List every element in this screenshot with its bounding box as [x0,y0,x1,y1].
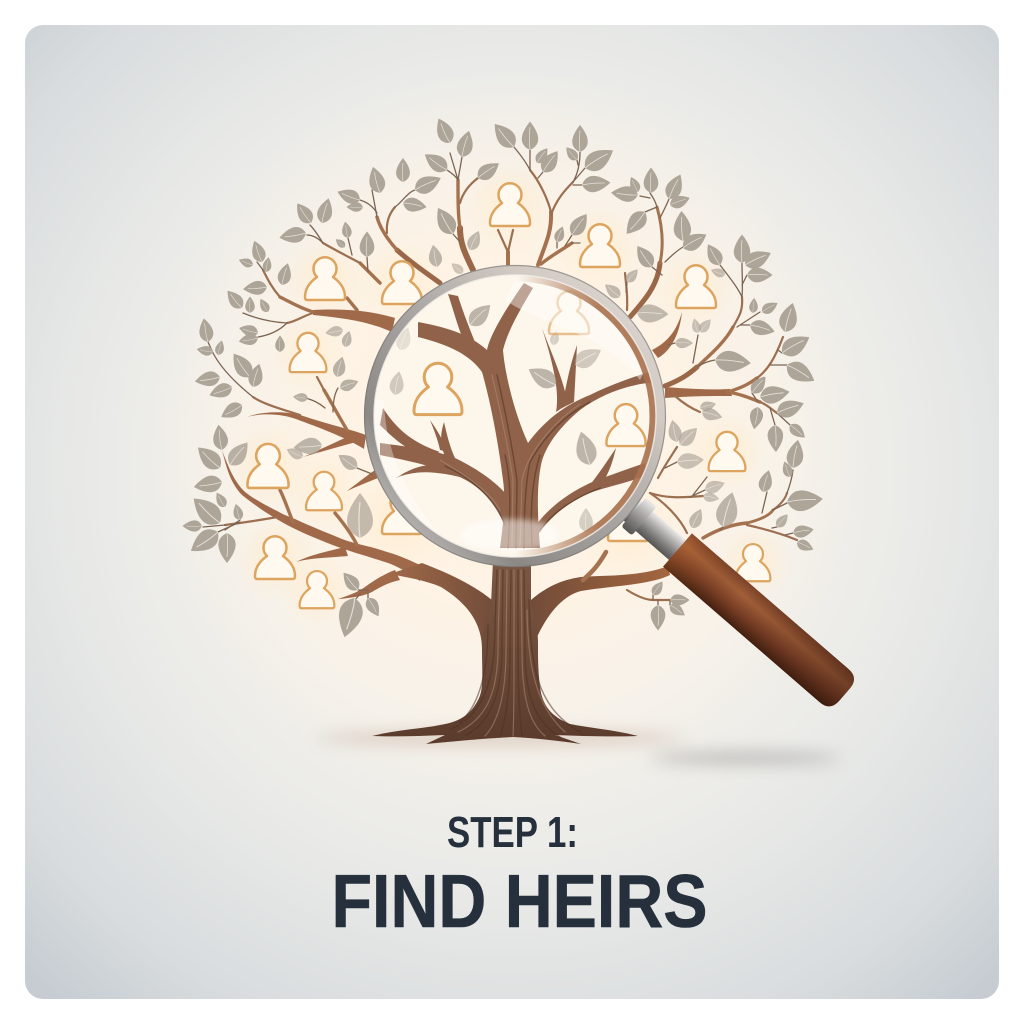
person icons on outer branches [247,183,770,608]
person glows [224,161,792,628]
persons inside lens [414,291,646,446]
magnifier handle [616,493,859,711]
upper left limbs [243,153,478,337]
ground shadow under tree [315,730,685,746]
right upper limbs [625,193,790,425]
lens ring [369,270,661,562]
magnifying glass [364,266,859,711]
top limbs [498,147,585,265]
lens reflections [380,283,643,549]
magnified tree inside lens [373,270,660,554]
right lower limbs [650,447,797,540]
copper inner reflection of ring [520,276,656,556]
magnifier shadow on ground [650,752,840,764]
warm glow behind tree [145,70,865,790]
heading: step number: STEP 1: [447,808,578,857]
leaves inside lens [388,299,605,532]
lens glass [372,273,658,559]
trunk with roots [372,560,638,744]
leaves on the outer branches [182,115,824,640]
big lower limbs [390,552,677,650]
lower left limbs [203,342,420,600]
tree branches outside the lens [203,147,797,650]
heading: find heirs: FIND HEIRS [332,859,708,943]
